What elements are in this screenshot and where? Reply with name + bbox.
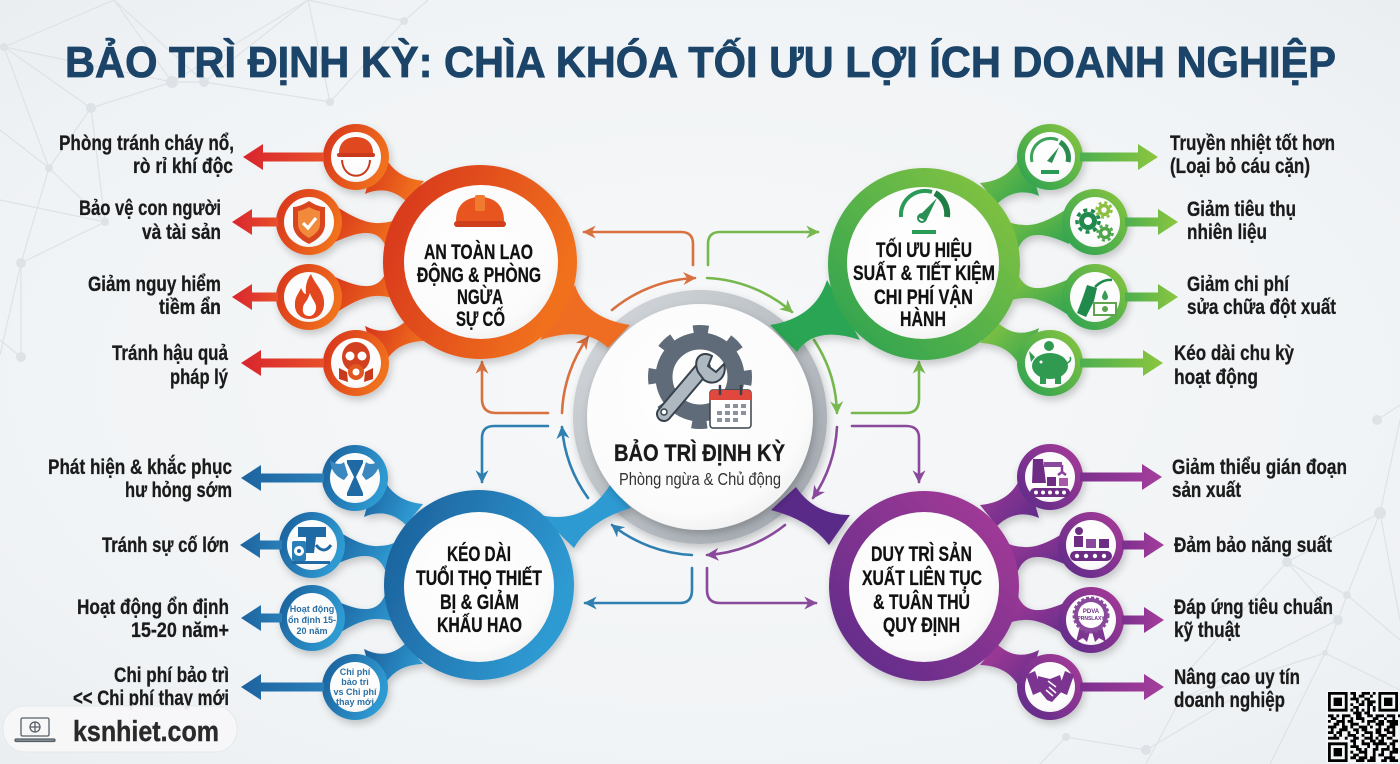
item: minimise downtime: Giảm thiểu gián đoạn	[1172, 455, 1347, 479]
heading: efficiency: TỐI ƯU HIỆU	[876, 236, 972, 262]
website name: ksnhiet.com	[73, 716, 219, 748]
heading: efficiency	[853, 236, 995, 331]
centre outer ring	[573, 290, 827, 544]
item: meet technical standards: Đáp ứng tiêu chuẩn	[1174, 595, 1333, 619]
panel: continuous production (purple)	[771, 444, 1347, 720]
item: reduce hidden hazards: Giảm nguy hiểm	[88, 272, 221, 296]
subheading: centre: Phòng ngừa & Chủ động	[619, 469, 781, 489]
panel: safety (red)	[59, 124, 630, 396]
item: protect people and assets	[79, 196, 334, 247]
item: fire and gas prevention: Phòng tránh cháy nổ,	[59, 131, 234, 155]
heading: production	[862, 541, 982, 637]
item: raise reputation	[1025, 662, 1300, 712]
item: ensure productivity: Đảm bảo năng suất	[1174, 533, 1332, 557]
hub: equipment life white disc	[404, 512, 554, 662]
item: stable operation	[77, 593, 337, 643]
title: BẢO TRÌ ĐỊNH KỲ: CHÌA KHÓA TỐI ƯU LỢI ÍCH DOANH NGHIỆP	[65, 36, 1336, 87]
item: minimise downtime: sản xuất	[1172, 478, 1241, 502]
item: cost comparison: vs Chi phí	[333, 687, 377, 697]
item: stable operation: Hoạt động	[290, 604, 334, 614]
heading: equipment life	[416, 541, 542, 637]
item: protect people and assets: Bảo vệ con người	[79, 196, 221, 220]
item: better heat transfer: (Loại bỏ cáu cặn)	[1170, 154, 1310, 178]
heading: efficiency: CHI PHÍ VẬN	[874, 284, 973, 309]
icon: laptop	[15, 718, 55, 742]
heading: equipment life: TUỔI THỌ THIẾT	[416, 565, 542, 590]
website pill	[3, 706, 237, 752]
item: fire and gas prevention	[59, 131, 381, 182]
item: early detection: hư hỏng sớm	[125, 478, 232, 502]
item: raise reputation: Nâng cao uy tín	[1174, 665, 1300, 689]
item: avoid legal consequences: pháp lý	[170, 365, 228, 389]
item: cost comparison	[73, 662, 380, 712]
item: early detection: Phát hiện & khắc phục	[48, 454, 232, 479]
item: stable operation: 15-20 năm+	[131, 618, 229, 642]
heading: production: XUẤT LIÊN TỤC	[862, 565, 982, 590]
item: lower repair cost: Giảm chi phí	[1187, 272, 1290, 296]
item: cost comparison: thay mới	[336, 697, 374, 707]
heading: centre: BẢO TRÌ ĐỊNH KỲ	[614, 438, 785, 467]
item: stable operation: ổn định 15-	[288, 615, 336, 625]
heading: production: DUY TRÌ SẢN	[871, 541, 972, 566]
heading: equipment life: KÉO DÀI	[447, 541, 511, 566]
heading: equipment life: BỊ & GIẢM	[440, 589, 519, 614]
icon: hard hat large	[454, 195, 506, 227]
item: fire and gas prevention: rò rỉ khí độc	[133, 154, 233, 178]
flow arrows around the centre hub	[482, 232, 919, 603]
heading: safety: ĐỘNG & PHÒNG	[417, 262, 541, 287]
heading: efficiency: SUẤT & TIẾT KIỆM	[853, 260, 995, 285]
icon: gauge large	[901, 191, 947, 234]
item: cost comparison: Chi phí bảo trì	[114, 663, 229, 687]
item: better heat transfer: Truyền nhiệt tốt hơn	[1170, 131, 1335, 155]
item: cost comparison: Chi phí	[340, 667, 371, 677]
item: avoid legal consequences	[112, 338, 381, 389]
panel: equipment life (blue)	[48, 445, 631, 720]
hub: safety ring with branches	[276, 124, 630, 396]
hub: efficiency white disc	[847, 187, 999, 339]
item: minimise downtime	[1025, 452, 1347, 502]
item: avoid major failure	[102, 520, 337, 570]
hub: safety white disc	[404, 185, 558, 339]
item: meet technical standards	[1066, 595, 1333, 645]
item: reduce hidden hazards	[88, 272, 334, 322]
item: extend operating cycle	[1025, 338, 1294, 389]
item: early detection	[48, 453, 380, 503]
item: reduce hidden hazards: tiềm ẩn	[159, 295, 221, 319]
item: cost comparison: bảo trì	[341, 677, 369, 687]
heading: production: QUY ĐỊNH	[883, 613, 960, 637]
item: lower fuel use: Giảm tiêu thụ	[1187, 197, 1296, 221]
heading: safety: SỰ CỐ	[456, 305, 505, 331]
item: ensure productivity	[1066, 520, 1332, 570]
item: stable operation: Hoạt động ổn định	[77, 595, 229, 619]
hub: production ring with branches	[771, 444, 1124, 720]
item: lower fuel use	[1070, 197, 1296, 247]
item: extend operating cycle: Kéo dài chu kỳ	[1174, 341, 1294, 365]
item: lower repair cost: sửa chữa đột xuất	[1187, 295, 1336, 319]
heading: production: & TUÂN THỦ	[873, 589, 970, 614]
heading: safety: AN TOÀN LAO	[424, 239, 533, 264]
heading: safety: NGỪA	[457, 284, 503, 309]
hub: production white disc	[849, 512, 999, 662]
item: protect people and assets: và tài sản	[142, 220, 221, 244]
item: avoid legal consequences: Tránh hậu quả	[112, 341, 229, 365]
centre white disc	[587, 304, 813, 530]
QR code	[1327, 691, 1400, 763]
icon: gear, wrench and calendar	[653, 330, 751, 428]
hub: equipment life ring with branches	[279, 445, 631, 720]
heading: safety	[417, 239, 541, 331]
panel: centre hub	[587, 304, 813, 530]
item: cost comparison: << Chi phí thay mới	[73, 686, 229, 710]
item: lower fuel use: nhiên liệu	[1187, 220, 1267, 244]
item: meet technical standards: PDVA	[1083, 609, 1100, 615]
item: meet technical standards: PRNSLAXY	[1077, 616, 1105, 622]
item: meet technical standards: kỹ thuật	[1174, 618, 1240, 642]
item: avoid major failure: Tránh sự cố lớn	[102, 533, 229, 557]
panel: efficiency (green)	[770, 124, 1336, 396]
item: raise reputation: doanh nghiệp	[1174, 688, 1285, 712]
item: stable operation: 20 năm	[296, 626, 328, 636]
item: extend operating cycle: hoạt động	[1174, 365, 1258, 389]
hub: efficiency ring with branches	[770, 124, 1128, 396]
heading: equipment life: KHẤU HAO	[437, 612, 522, 637]
item: lower repair cost	[1070, 272, 1336, 322]
heading: efficiency: HÀNH	[900, 306, 946, 331]
item: better heat transfer	[1025, 131, 1335, 182]
